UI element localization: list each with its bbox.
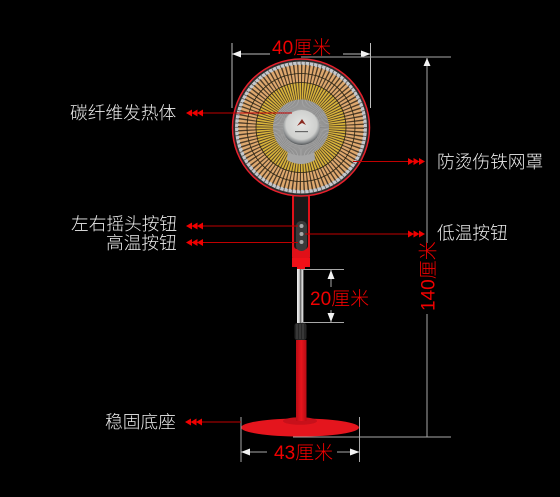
callout: low temperature button [305, 223, 508, 243]
dimension: height 140cm: 140厘米 [418, 241, 440, 311]
silver centre disc [273, 100, 329, 164]
callout: high temperature button [106, 233, 298, 253]
dimension: width 40cm: 40厘米 [272, 37, 331, 59]
callout: stable base: 稳固底座 [105, 412, 176, 432]
dimension: base width 43cm: 43厘米 [274, 442, 333, 464]
callout: stable base [105, 412, 241, 432]
heater head [232, 59, 370, 196]
callout: swing button: 左右摇头按钮 [71, 214, 177, 234]
callout: anti-scald guard: 防烫伤铁网罩 [437, 152, 543, 172]
control neck [292, 194, 310, 269]
callout: swing button [71, 214, 298, 234]
product: standing heater [232, 59, 370, 436]
callout: anti-scald guard [353, 152, 543, 172]
guard rings [247, 74, 355, 182]
centre badge [283, 110, 320, 145]
height collar knob [294, 323, 306, 340]
radial spokes [256, 82, 346, 172]
chrome upper pole [297, 268, 304, 323]
callout: carbon fibre heater: 碳纤维发热体 [70, 103, 176, 123]
dimension: pole travel 20cm: 20厘米 [310, 288, 369, 310]
dimension: pole travel 20cm [301, 270, 369, 322]
callout: high temperature button: 高温按钮 [106, 233, 177, 253]
pedestal base [241, 417, 359, 436]
red lower pole [296, 340, 306, 421]
callout: low temperature button: 低温按钮 [437, 223, 508, 243]
dimension: width 40cm [232, 37, 370, 108]
dimension: height 140cm [293, 57, 451, 437]
control buttons [300, 224, 304, 244]
dimension: base width 43cm [241, 417, 360, 464]
callout: carbon fibre heater [70, 103, 292, 123]
